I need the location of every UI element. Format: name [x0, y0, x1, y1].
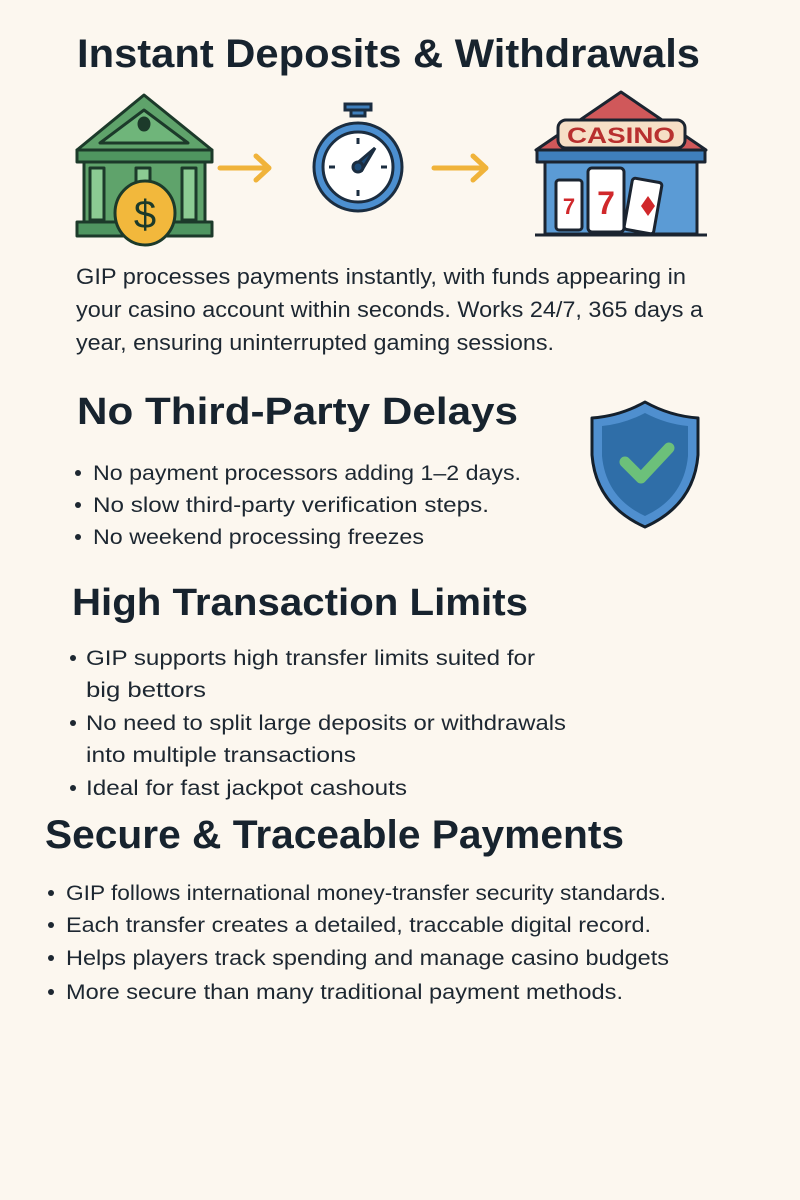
- title: secure & traceable: Secure & Traceable Payments: [45, 813, 624, 857]
- icon: bank with coin: [77, 95, 212, 245]
- bullets: secure: Each transfer creates a detailed, traccable digital record.: [66, 914, 651, 937]
- bullets: delays: No payment processors adding 1–2 days.: [93, 462, 521, 485]
- icon text: slot sevens: 7: [597, 185, 615, 221]
- paragraph: GIP processes payments instantly, with funds appearing in: [76, 264, 686, 289]
- icon: shield check: [592, 402, 698, 527]
- paragraph: your casino account within seconds. Works 24/7, 365 days a: [76, 297, 704, 322]
- icon text: slot sevens: [563, 185, 655, 221]
- bullets: secure: More secure than many traditional payment methods.: [66, 981, 623, 1004]
- bullets: limits: GIP supports high transfer limits suited for: [86, 647, 535, 670]
- title: no third-party delays: No Third-Party Delays: [77, 391, 518, 433]
- bullets: delays: No weekend processing freezes: [93, 526, 424, 549]
- arrow 2: [434, 156, 486, 180]
- icon text: casino sign: CASINO: [567, 123, 675, 148]
- bullets: delays: [75, 462, 521, 549]
- icon text: slot sevens: 7: [563, 194, 575, 219]
- arrow 1: [220, 156, 269, 180]
- bullets: limits: Ideal for fast jackpot cashouts: [86, 777, 407, 800]
- bullets: limits: [70, 647, 566, 800]
- icon text: dollar: $: [134, 193, 156, 237]
- bullets: limits: No need to split large deposits or withdrawals: [86, 712, 566, 735]
- title: high transaction limits: High Transaction Limits: [72, 582, 528, 624]
- bullets: limits: into multiple transactions: [86, 744, 356, 767]
- icon: stopwatch: [314, 104, 402, 211]
- bullets: limits: big bettors: [86, 679, 206, 702]
- paragraph: [76, 264, 704, 355]
- bullets: secure: [48, 882, 669, 1004]
- bullets: delays: No slow third-party verification steps.: [93, 494, 489, 517]
- paragraph: year, ensuring uninterrupted gaming sessions.: [76, 330, 554, 355]
- bullets: secure: GIP follows international money-transfer security standards.: [66, 882, 666, 905]
- bullets: secure: Helps players track spending and manage casino budgets: [66, 947, 669, 970]
- title: instant deposits: Instant Deposits & Withdrawals: [77, 32, 700, 76]
- icon: casino building: [535, 92, 707, 235]
